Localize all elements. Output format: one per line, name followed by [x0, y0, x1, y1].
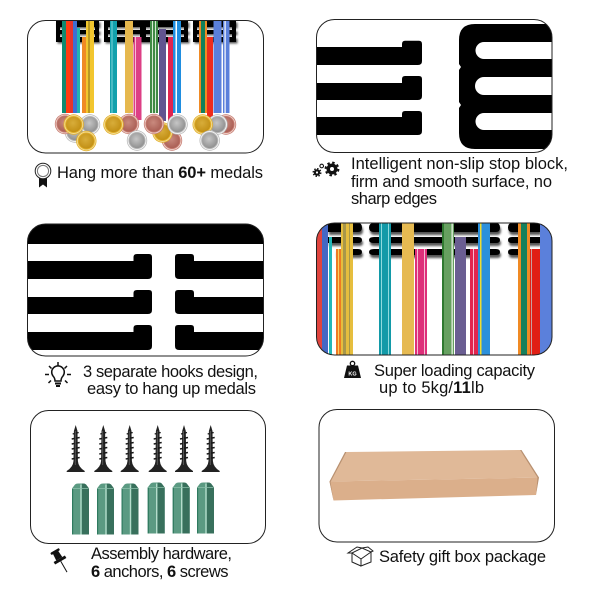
icon: push pin — [49, 547, 73, 575]
icon: light bulb — [45, 362, 71, 386]
caption: hardware: Assembly hardware, — [91, 545, 232, 563]
caption: loading capacity — [374, 362, 536, 397]
caption: loading capacity: Super loading capacity — [374, 362, 536, 380]
caption: loading capacity: up to 5kg/11lb — [379, 379, 484, 397]
caption: stop block: sharp edges — [351, 190, 437, 208]
caption: gift box: Safety gift box package — [379, 548, 546, 566]
icon: weight: KG — [348, 372, 357, 378]
right frame — [459, 24, 553, 149]
caption: stop block: Intelligent non-slip stop block, — [351, 155, 568, 173]
caption: stop block: firm and smooth surface, no — [351, 173, 552, 191]
box — [330, 450, 539, 500]
anchors — [72, 482, 214, 534]
caption: hardware — [91, 545, 232, 581]
caption: hardware: 6 anchors, 6 screws — [91, 563, 228, 581]
ribbons — [62, 21, 230, 121]
icon: medal rosette — [35, 163, 51, 188]
left hooks — [316, 41, 422, 65]
caption: medals: Hang more than 60+ medals — [57, 164, 263, 182]
panel: medals on rack — [28, 20, 264, 153]
caption: hooks — [83, 363, 258, 398]
panel: stop block closeup — [316, 20, 553, 152]
caption: stop block — [351, 155, 568, 208]
panel: gift box — [319, 410, 554, 542]
rack — [56, 21, 238, 44]
ribbons — [316, 223, 552, 355]
icon: gears — [313, 163, 338, 176]
icon: open box — [348, 547, 373, 566]
medals — [55, 114, 236, 151]
caption: hooks: 3 separate hooks design, — [83, 363, 258, 381]
caption: hooks: easy to hang up medals — [87, 380, 256, 398]
panel: separate hooks closeup — [27, 224, 264, 356]
rack — [328, 223, 541, 258]
screws — [67, 425, 220, 472]
icon: weight — [344, 361, 361, 378]
panel: ribbons closeup — [316, 223, 552, 355]
panel: assembly hardware — [30, 410, 266, 544]
